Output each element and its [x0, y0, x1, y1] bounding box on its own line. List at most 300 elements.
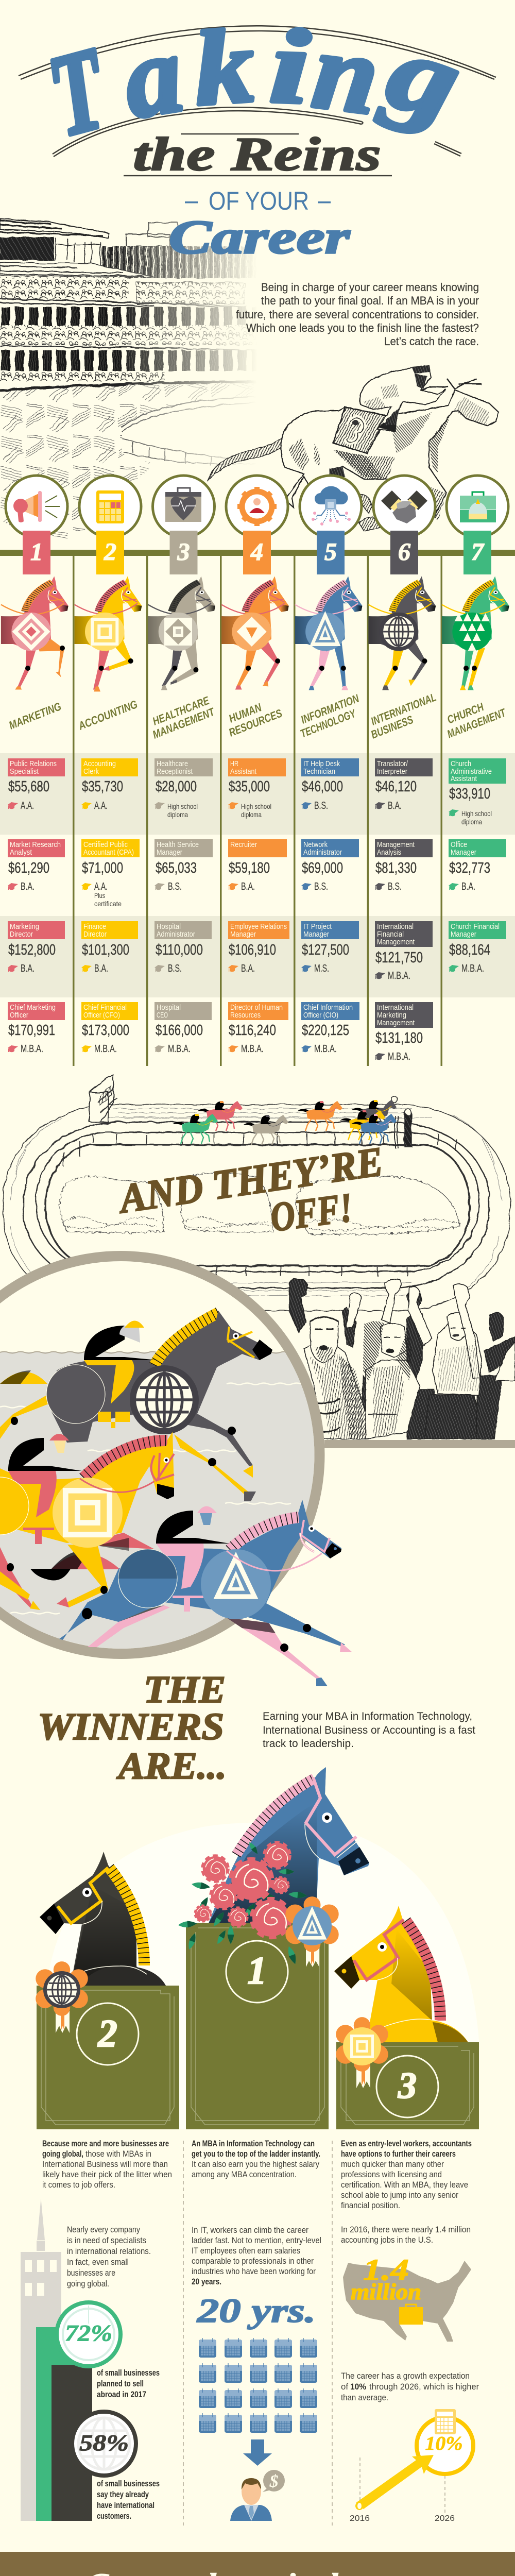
column 3 text: school able to jump into any senior	[341, 2190, 458, 2200]
label: INTERNATIONAL	[369, 690, 438, 728]
caption: 72 percent: planned to sell	[97, 2379, 144, 2388]
cell: translator interpreter	[375, 758, 433, 811]
cell: church financial manager: M.B.A.	[461, 963, 484, 974]
cell: employee relations manager: Manager	[230, 930, 256, 939]
cell: market research analyst	[8, 839, 65, 892]
column 2 second paragraph: 20 years.	[192, 2277, 221, 2286]
cell: network administrator: $69,000	[302, 860, 343, 876]
cell: translator interpreter: Interpreter	[377, 767, 407, 776]
icon: professional with dollar bubble	[230, 2470, 285, 2521]
cell: public relations specialist: Specialist	[10, 767, 39, 776]
cell: HR assistant: HR	[230, 759, 238, 768]
podium: 2nd place: 2	[97, 2012, 117, 2055]
caption: 72 percent: of small businesses	[97, 2368, 160, 2378]
label: INFORMATION	[299, 691, 361, 726]
cell: director of human resources: Director of Human	[230, 1003, 283, 1012]
salary table	[8, 758, 506, 1062]
cell: international marketing management: M.B.A.	[388, 1051, 410, 1062]
cell: accounting clerk	[81, 758, 138, 811]
lane 5: information technology	[295, 476, 362, 740]
title: Career: Career	[169, 211, 351, 263]
cell: international marketing management: Management	[377, 1019, 415, 1027]
column 1 text	[42, 2139, 172, 2190]
stat: 58 percent: 58%	[79, 2430, 129, 2455]
heading: the winners are	[38, 1669, 227, 1787]
column 2 text: among any MBA concentration.	[192, 2170, 297, 2179]
cell: chief marketing officer	[8, 1002, 65, 1055]
cell: management analysis: Management	[377, 840, 415, 849]
cell: church administrative assistant: diploma	[461, 818, 482, 826]
horse: marketing	[1, 577, 68, 690]
cell: accounting clerk: $35,730	[82, 778, 123, 795]
number tag 3	[170, 531, 198, 574]
winners intro text: track to leadership.	[263, 1738, 354, 1750]
podium: 3rd place: 3	[398, 2065, 417, 2106]
dashed column dividers	[183, 2141, 332, 2526]
illustration: sketched jockey and horse	[207, 366, 499, 531]
title group	[19, 7, 496, 263]
cell: public relations specialist: A.A.	[21, 800, 34, 811]
heading: the winners are: ARE...	[116, 1745, 227, 1787]
cell: chief marketing officer: M.B.A.	[21, 1043, 43, 1055]
label: ACCOUNTING	[76, 698, 139, 733]
horse: accounting racer	[0, 1432, 174, 1610]
cell: church administrative assistant: High school	[461, 809, 492, 818]
title: Taking	[37, 7, 472, 161]
column 3 third paragraph: than average.	[341, 2393, 388, 2402]
number tag 2: 2	[104, 538, 116, 566]
illustration: cheering crowd sketch	[289, 1279, 515, 1439]
rule under crowd	[324, 1440, 515, 1448]
cell: accounting clerk: Accounting	[83, 759, 116, 768]
caption: 58 percent: have international	[97, 2500, 154, 2510]
cell: IT help desk technician: $46,000	[302, 778, 343, 795]
number tag 4: 4	[250, 538, 263, 566]
chart: 10 percent growth arrow: 10%	[425, 2433, 462, 2454]
cell: international marketing management: Marketing	[377, 1011, 406, 1020]
cell: health service manager: Manager	[157, 848, 182, 857]
column 2 text: An MBA in Information Technology can	[192, 2139, 315, 2148]
heading: the winners are: WINNERS	[38, 1706, 224, 1748]
cell: marketing director: B.A.	[21, 963, 35, 974]
cell: chief information officer: M.B.A.	[314, 1043, 337, 1055]
cell: certified public accountant: A.A.	[94, 881, 108, 892]
label: MARKETING	[7, 700, 63, 732]
cell: chief financial officer: $173,000	[82, 1022, 129, 1039]
arrow: down	[243, 2439, 272, 2466]
icon: cloud network	[300, 476, 362, 537]
cell: church financial manager	[449, 921, 506, 974]
starting gate rail and lane lines	[0, 550, 515, 1066]
stat: 72 percent: 72%	[65, 2320, 112, 2346]
cell: finance director: Director	[83, 930, 107, 939]
cell: chief financial officer: Chief Financial	[83, 1003, 127, 1012]
column 3 text: Even as entry-level workers, accountants	[341, 2139, 472, 2148]
column 1 text: Because more and more businesses are	[42, 2139, 169, 2148]
caption: 72 percent	[97, 2368, 160, 2399]
cell: office manager: $32,773	[449, 860, 490, 876]
lane 6: international business	[368, 476, 438, 741]
cell: recruiter: $59,180	[229, 860, 270, 876]
cell: management analysis: $81,330	[375, 860, 417, 876]
cell: IT help desk technician: B.S.	[314, 800, 328, 811]
cell: marketing director	[8, 921, 65, 974]
icon: megaphone	[6, 476, 67, 537]
cell: international financial management: Management	[377, 938, 415, 946]
column 2 second paragraph: industries who have been working for	[192, 2266, 316, 2276]
cell: office manager: B.A.	[461, 881, 475, 892]
rosette: 3rd place	[336, 2017, 388, 2088]
cell: chief marketing officer: Chief Marketing	[10, 1003, 56, 1012]
cell: hospital administrator: Hospital	[157, 922, 181, 931]
cell: IT project manager: $127,500	[302, 942, 349, 958]
column 2 second paragraph	[192, 2225, 321, 2286]
cell: hospital CEO: $166,000	[156, 1022, 203, 1039]
label: RESOURCES	[227, 706, 284, 739]
illustration: oval race track	[3, 1075, 510, 1311]
column 3 third paragraph: 10%	[350, 2382, 366, 2392]
column 1 second paragraph	[67, 2225, 151, 2289]
icon: gear with person	[226, 476, 288, 537]
horse: international business racer	[0, 1311, 272, 1501]
cell: finance director: B.A.	[94, 963, 108, 974]
column 3 second paragraph: In 2016, there were nearly 1.4 million	[341, 2225, 471, 2234]
cell: international financial management: International	[377, 922, 414, 931]
cell: market research analyst: Market Research	[10, 840, 61, 849]
number tag 7: 7	[471, 538, 485, 566]
cell: chief information officer: Chief Information	[303, 1003, 353, 1012]
chart: 10 percent growth arrow	[350, 2409, 473, 2523]
column 3 text: much quicker than many other	[341, 2159, 444, 2169]
cell: director of human resources: Resources	[230, 1011, 261, 1020]
cell: network administrator: Network	[303, 840, 328, 849]
number tag 2	[96, 531, 124, 574]
intro paragraph: Let’s catch the race.	[384, 335, 479, 348]
cell: network administrator: Administrator	[303, 848, 342, 857]
lane 3: healthcare management	[148, 476, 217, 741]
cell: HR assistant: Assistant	[230, 767, 257, 776]
cell: recruiter: B.A.	[241, 881, 255, 892]
cell: employee relations manager: B.A.	[241, 963, 255, 974]
label	[299, 691, 361, 740]
title: Taking: T	[37, 23, 121, 161]
intro paragraph: Being in charge of your career means knowing	[261, 281, 479, 294]
label	[369, 690, 438, 741]
cell: health service manager	[154, 839, 213, 892]
cell: IT help desk technician: IT Help Desk	[303, 759, 340, 768]
cell: chief information officer	[301, 1002, 359, 1055]
cell: certified public accountant: $71,000	[82, 860, 123, 876]
title: Taking: n	[307, 9, 385, 138]
horse: information technology	[295, 577, 362, 690]
cell: IT project manager: M.S.	[314, 963, 329, 974]
caption: 58 percent: of small businesses	[97, 2479, 160, 2488]
column 1 text: going global,	[42, 2149, 83, 2159]
horse: international business	[368, 577, 436, 690]
icon: church case	[447, 476, 508, 537]
column 2 text: It can also earn you the highest salary	[192, 2159, 319, 2169]
number tag 6: 6	[398, 538, 410, 566]
chart: skyscraper bars	[21, 2198, 92, 2521]
intro paragraph: Which one leads you to the finish line the fastest?	[246, 321, 479, 334]
cell: network administrator: B.S.	[314, 881, 328, 892]
cell: HR assistant	[228, 758, 286, 819]
cell: translator interpreter: B.A.	[388, 800, 402, 811]
column 3 text	[341, 2139, 472, 2210]
icon grid: 20 calendars	[199, 2338, 317, 2433]
column 3 third paragraph: The career has a growth expectation	[341, 2371, 470, 2381]
heading: the winners are: THE	[144, 1669, 226, 1711]
cell: healthcare receptionist: Healthcare	[157, 759, 188, 768]
label: BUSINESS	[369, 713, 415, 741]
cell: market research analyst: B.A.	[21, 881, 35, 892]
intro paragraph	[236, 281, 479, 348]
number tag 5: 5	[324, 538, 337, 566]
intro paragraph: future, there are several concentrations to consider.	[236, 308, 479, 321]
label: MANAGEMENT	[151, 705, 217, 741]
label: HUMAN	[227, 701, 264, 725]
cell: management analysis: B.S.	[388, 881, 402, 892]
winners intro text	[263, 1710, 475, 1750]
winner's rose garland	[178, 1841, 307, 1965]
cell: HR assistant: $35,000	[229, 778, 270, 795]
column 1 second paragraph: is in need of specialists	[67, 2235, 146, 2245]
cell: chief information officer: Officer (CIO)	[303, 1011, 338, 1020]
column 1 text: it comes to job offers.	[42, 2180, 115, 2190]
call to action band	[0, 2552, 515, 2576]
column 2 second paragraph: comparable to professionals in other	[192, 2256, 314, 2266]
cell: office manager: Office	[451, 840, 467, 849]
cell: international financial management	[375, 921, 433, 981]
cell: international financial management: M.B.A.	[388, 970, 410, 981]
lane 4: human resources	[221, 476, 289, 739]
column 3 text: financial position.	[341, 2200, 400, 2210]
column 3 text: professions with licensing and	[341, 2170, 442, 2179]
cell: finance director	[81, 921, 138, 974]
podium: 3rd place	[336, 2042, 479, 2129]
cell: church financial manager: $88,164	[449, 942, 490, 958]
cell: market research analyst: $61,290	[8, 860, 49, 876]
number tag 1: 1	[30, 538, 43, 566]
cell: IT project manager: IT Project	[303, 922, 332, 931]
cell: hospital administrator	[154, 921, 212, 974]
cell: certified public accountant: Plus	[94, 891, 105, 900]
cell: network administrator	[301, 839, 359, 892]
title ornament arcs	[19, 26, 496, 157]
cell: hospital CEO: Hospital	[157, 1003, 181, 1012]
cell: chief financial officer: M.B.A.	[94, 1043, 117, 1055]
table background bands	[0, 753, 515, 997]
caption: 58 percent	[97, 2479, 160, 2521]
winners intro text: International Business or Accounting is a fast	[263, 1724, 475, 1736]
stat: 72 percent	[57, 2302, 121, 2366]
cell: accounting clerk: Clerk	[83, 767, 99, 776]
podium: 1st place: 1	[247, 1950, 267, 1992]
cell: church administrative assistant: Assistant	[451, 774, 477, 783]
cell: director of human resources: $116,240	[229, 1022, 276, 1039]
cell: international financial management: Financial	[377, 930, 404, 939]
column 3 text: have options to further their careers	[341, 2149, 456, 2159]
horse: information technology racer	[59, 1500, 352, 1686]
cell: IT project manager: Manager	[303, 930, 329, 939]
cell: HR assistant: diploma	[241, 810, 262, 819]
cell: hospital CEO	[154, 1002, 212, 1055]
label: HEALTHCARE	[151, 694, 212, 728]
column 1 second paragraph: businesses are	[67, 2268, 115, 2278]
intro paragraph: the path to your final goal. If an MBA is in your	[261, 294, 479, 307]
column 1 text: those with MBAs in	[85, 2149, 151, 2159]
title: the Reins	[124, 128, 392, 180]
rosette: 2nd place	[36, 1961, 88, 2033]
title: Taking: g	[373, 10, 472, 143]
podium spotlight	[37, 1823, 479, 2129]
cell: management analysis: Analysis	[377, 848, 401, 857]
column 3 third paragraph	[341, 2371, 479, 2402]
cell: translator interpreter: $46,120	[375, 778, 417, 795]
big stat: 20 yrs: 20 yrs.	[197, 2292, 316, 2330]
column 2 second paragraph: ladder fast. Not to mention, entry-level	[192, 2235, 321, 2245]
column 1 second paragraph: In fact, even small	[67, 2257, 129, 2267]
column 2 text	[192, 2139, 320, 2179]
cell: accounting clerk: A.A.	[94, 800, 108, 811]
winner: black horse	[40, 1852, 166, 1989]
cell: church administrative assistant: $33,910	[449, 786, 490, 802]
label: TECHNOLOGY	[299, 706, 358, 740]
cell: recruiter	[228, 839, 287, 892]
rosette: 1st place	[285, 1896, 339, 1967]
column 2 second paragraph: IT employees often earn salaries	[192, 2246, 300, 2256]
illustration: grandstand sketch	[0, 218, 258, 541]
heading: and they're off: AND THEY’RE	[114, 1139, 386, 1223]
number tag 4	[243, 531, 271, 574]
cell: certified public accountant: Certified Public	[83, 840, 128, 849]
caption: 72 percent: abroad in 2017	[97, 2389, 146, 2399]
heading: and they're off: OFF!	[268, 1185, 355, 1241]
cell: employee relations manager: $106,910	[229, 942, 276, 958]
column 3 third paragraph: through 2026, which is higher	[369, 2382, 479, 2392]
cell: employee relations manager: Employee Relations	[230, 922, 287, 931]
cell: hospital administrator: B.S.	[168, 963, 182, 974]
number tag 6	[390, 531, 418, 574]
horse: healthcare	[148, 577, 215, 690]
title: of your: OF YOUR	[209, 187, 309, 215]
number tag 3: 3	[177, 538, 190, 566]
number tag 5	[317, 531, 345, 574]
cell: HR assistant: High school	[241, 802, 271, 810]
winner: blue horse	[209, 1767, 369, 1923]
cell: office manager	[449, 839, 506, 892]
title: Taking: k	[191, 7, 258, 128]
cell: employee relations manager	[228, 921, 289, 974]
column 3 second paragraph: accounting jobs in the U.S.	[341, 2235, 433, 2245]
horse: accounting	[75, 577, 142, 691]
cell: healthcare receptionist: diploma	[167, 810, 188, 819]
cell: church administrative assistant	[449, 758, 506, 826]
label: CHURCH	[445, 700, 486, 726]
map: 1.4 million US jobs: 1.4	[363, 2253, 409, 2286]
cell: translator interpreter: Translator/	[377, 759, 408, 768]
turf band	[0, 1352, 330, 1661]
title: the Reins: the Reins	[133, 128, 381, 180]
circular race panel	[0, 1256, 352, 1686]
title: Taking: a	[115, 11, 190, 142]
cell: office manager: Manager	[451, 848, 476, 857]
cell: healthcare receptionist	[154, 758, 213, 819]
cell: church financial manager: Manager	[451, 930, 476, 939]
podium: 1st place	[186, 1923, 329, 2129]
cell: church administrative assistant: Church	[451, 759, 471, 768]
cell: IT help desk technician: Technician	[303, 767, 335, 776]
cell: hospital administrator: Administrator	[157, 930, 195, 939]
title: Taking: i	[268, 7, 312, 126]
winners intro text: Earning your MBA in Information Technology,	[263, 1710, 472, 1722]
cell: recruiter: Recruiter	[230, 840, 257, 849]
cell: IT help desk technician	[301, 758, 359, 811]
cell: healthcare receptionist: Receptionist	[157, 767, 193, 776]
icon: calculator	[79, 476, 141, 537]
lane 1: marketing	[1, 476, 68, 732]
cell: health service manager: Health Service	[157, 840, 199, 849]
column 1 text: International Business will more than	[42, 2159, 168, 2169]
illustration: infield shrubs	[60, 1173, 460, 1234]
number tag 1	[23, 531, 50, 574]
cell: international financial management: $121,750	[375, 950, 423, 966]
cell: chief marketing officer: $170,991	[8, 1022, 55, 1039]
cell: chief information officer: $220,125	[302, 1022, 349, 1039]
cell: church administrative assistant: Administrative	[451, 767, 492, 776]
cell: health service manager: $65,033	[156, 860, 197, 876]
cell: management analysis	[375, 839, 433, 892]
chart: 10 percent growth arrow: 2026	[435, 2514, 455, 2523]
cell: certified public accountant	[81, 839, 140, 908]
cell: public relations specialist: Public Relations	[10, 759, 57, 768]
cell: director of human resources: M.B.A.	[241, 1043, 264, 1055]
column 3 third paragraph: of	[341, 2382, 348, 2392]
icon: medical case	[152, 476, 214, 537]
column 1 second paragraph: in international relations.	[67, 2246, 151, 2256]
cell: finance director: Finance	[83, 922, 106, 931]
icon: handshake	[373, 476, 435, 537]
horse: human resources	[221, 577, 289, 690]
number tag 7	[464, 531, 491, 574]
podium: 2nd place	[37, 1986, 179, 2129]
cell: chief financial officer: Officer (CFO)	[83, 1011, 120, 1020]
cell: certified public accountant: Accountant (CPA)	[83, 848, 134, 857]
cell: chief marketing officer: Officer	[10, 1011, 28, 1020]
cell: health service manager: B.S.	[168, 881, 182, 892]
column 1 second paragraph: Nearly every company	[67, 2225, 140, 2234]
column 1 second paragraph: going global.	[67, 2279, 109, 2289]
column 3 text: certification. With an MBA, they leave	[341, 2180, 468, 2190]
cell: hospital administrator: $110,000	[156, 942, 203, 958]
cell: marketing director: Marketing	[10, 922, 39, 931]
cell: hospital CEO: CEO	[157, 1011, 168, 1020]
cell: hospital CEO: M.B.A.	[168, 1043, 191, 1055]
map: 1.4 million US jobs: million	[351, 2279, 421, 2304]
column 3 second paragraph	[341, 2225, 471, 2245]
cell: certified public accountant: certificate	[94, 900, 122, 908]
caption: 58 percent: customers.	[97, 2511, 131, 2521]
column 2 second paragraph: In IT, workers can climb the career	[192, 2225, 308, 2235]
lane 2: accounting	[75, 476, 142, 733]
winner: yellow horse	[334, 1906, 468, 2042]
horse: church management	[442, 577, 509, 690]
cell: public relations specialist: $55,680	[8, 778, 49, 795]
stat: 58 percent	[72, 2412, 136, 2476]
column 2 text: get you to the top of the ladder instantly.	[192, 2149, 320, 2159]
cell: finance director: $101,300	[82, 942, 129, 958]
cell: IT project manager	[301, 921, 359, 974]
